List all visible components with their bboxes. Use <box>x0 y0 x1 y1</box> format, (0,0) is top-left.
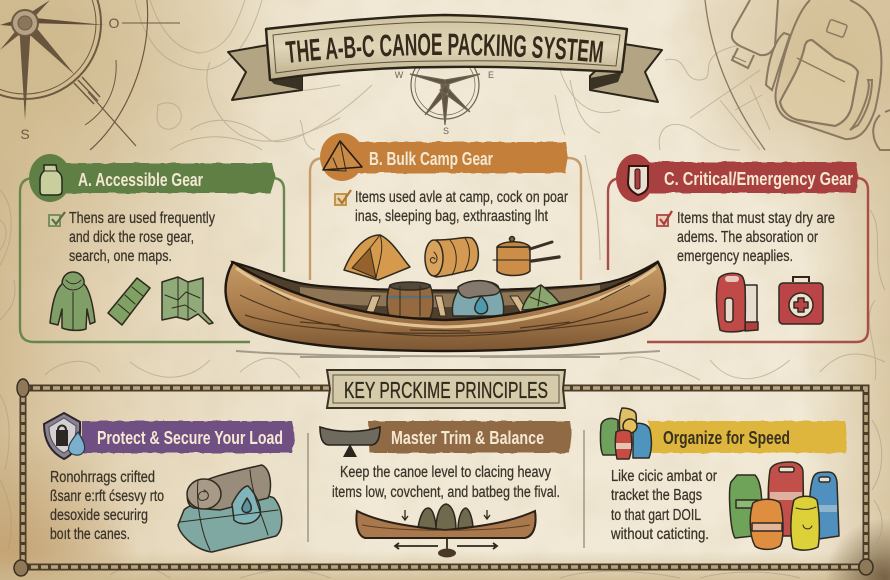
body text brown: items low, covchent, and batbeg the fival. <box>332 484 560 501</box>
body text A: Thens are used frequently <box>69 210 215 227</box>
icon: cooking pot <box>493 236 559 276</box>
barrel <box>387 282 433 318</box>
heading band A <box>50 163 275 193</box>
body text purple: boıt the canes. <box>50 526 130 543</box>
compass rose, top left: S <box>20 126 30 142</box>
body text C: adems. The absoration or <box>677 229 818 246</box>
body text brown <box>332 464 560 501</box>
icon: folded strip <box>108 278 150 325</box>
icon: jar <box>29 154 71 202</box>
body text C: Items that must stay dry are <box>677 210 835 227</box>
principle: organize for speed <box>600 408 847 550</box>
icon: balanced canoe <box>320 427 380 457</box>
packed blue dry bag <box>452 281 504 316</box>
heading band B <box>342 142 568 173</box>
icon: strapped gear bundle <box>178 465 282 552</box>
body text B: inas, sleeping bag, exthraasting lht <box>355 208 549 225</box>
left ribbon tail <box>228 45 302 100</box>
canoe hull <box>226 262 665 351</box>
icon: first aid kit <box>779 277 823 324</box>
icon: rain jacket <box>50 272 95 330</box>
body text purple: desoxide securirg <box>50 507 148 524</box>
canoe illustration <box>226 262 665 357</box>
main ribbon band <box>266 15 627 80</box>
body text C <box>677 210 835 265</box>
principle: protect and secure <box>44 413 295 552</box>
heading brown text: Master Trim & Balance <box>391 428 544 448</box>
compass rose, top left: O <box>109 15 120 31</box>
key principles banner: KEY PRCKIME PRINCIPLES <box>344 377 548 403</box>
heading band purple <box>82 421 295 453</box>
body text C: emergency neaplies. <box>677 248 793 265</box>
principle: master trim and balance <box>320 421 572 558</box>
key principles frame <box>14 370 873 576</box>
panel C: critical and emergency gear <box>608 154 868 342</box>
title banner <box>227 14 663 103</box>
heading A text: A. Accessible Gear <box>78 170 203 190</box>
icon: folded map <box>162 277 213 324</box>
icon: colourful dry bags <box>730 462 839 550</box>
body text A: and dick the rose gear, <box>69 229 194 246</box>
rim and plank lines <box>236 268 656 327</box>
body text yellow: to that gart DOIL <box>611 507 701 524</box>
canoe interior <box>232 262 657 330</box>
icon: emergency dry container <box>716 273 758 332</box>
body text A <box>69 210 215 265</box>
body text purple <box>50 469 164 543</box>
heading C text: C. Critical/Emergency Gear <box>664 169 853 189</box>
small compass behind title: S <box>443 126 449 136</box>
body text purple: ßsanr e:rft ćsesvy rto <box>50 488 164 505</box>
small compass behind title: E <box>488 70 494 80</box>
heading band brown <box>368 421 572 453</box>
panel B: bulk camp gear <box>310 133 581 280</box>
water shadow <box>236 351 660 357</box>
body text purple: Ronohrrags crifted <box>50 469 155 486</box>
key principles banner <box>327 370 565 408</box>
heading purple text: Protect & Secure Your Load <box>97 428 283 448</box>
compass rose, top left <box>0 0 180 150</box>
body text A: search, one maps. <box>69 248 172 265</box>
body text B: Items used avle at camp, cock on poar <box>355 189 568 206</box>
rope corner knots <box>14 379 873 576</box>
body text brown: Keep the canoe level to clacing heavy <box>340 464 551 481</box>
body text yellow: Like cicic ambat or <box>611 468 717 485</box>
heading band C <box>640 162 858 193</box>
thwart seats <box>366 296 528 312</box>
heading B text: B. Bulk Camp Gear <box>369 149 493 169</box>
green tent pack <box>522 285 560 310</box>
heading yellow text: Organize for Speed <box>663 428 790 448</box>
rope border <box>23 388 866 567</box>
right ribbon tail <box>590 44 662 102</box>
icon: sleeping bag <box>425 237 478 277</box>
icon: shield with water drop <box>44 413 85 459</box>
icon: checkbox B <box>335 190 351 205</box>
panel A: accessible gear <box>20 154 284 342</box>
heading band yellow <box>648 421 847 453</box>
icon: tent badge <box>320 133 364 181</box>
body text B <box>355 189 568 225</box>
icon: small dry bag cluster <box>600 408 651 459</box>
title text: THE A-B-C CANOE PACKING SYSTEM <box>285 34 604 63</box>
body text yellow <box>610 468 717 543</box>
body text yellow: tracket the Bags <box>611 487 702 504</box>
body text yellow: without caticting. <box>610 526 709 543</box>
small compass behind title: W <box>395 70 404 80</box>
icon: checkbox A <box>49 212 65 226</box>
icon: dry case badge <box>616 154 654 202</box>
backpack and phone sketch, top right <box>705 0 890 150</box>
diagram: balanced canoe with load <box>356 504 536 558</box>
icon: checkbox C <box>657 211 672 226</box>
small compass behind title <box>395 51 494 136</box>
icon: tent <box>344 235 410 280</box>
